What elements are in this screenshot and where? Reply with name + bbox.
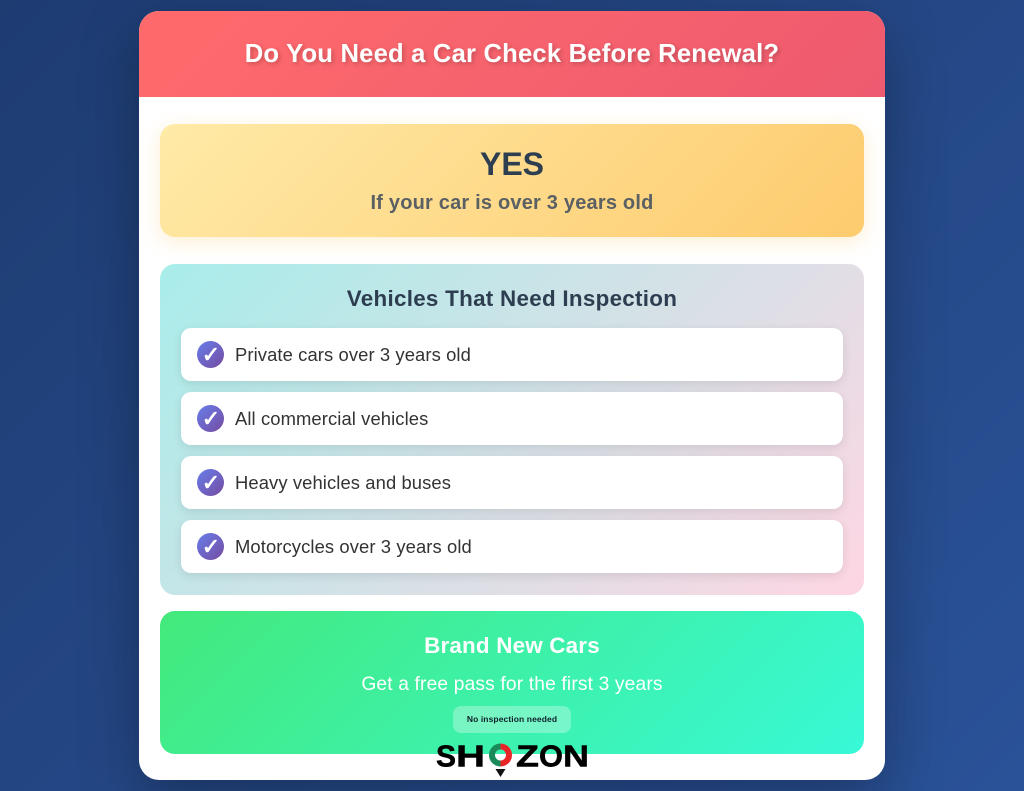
logo text left: S <box>436 738 456 774</box>
logo text right: O <box>539 738 563 774</box>
panel: yes answer <box>160 124 864 237</box>
list item: heavy vehicles <box>181 456 843 509</box>
icon: check: ✓ <box>202 535 220 560</box>
header banner <box>139 11 885 97</box>
logo text left <box>436 738 485 774</box>
list item: motorcycles <box>181 520 843 573</box>
logo text right <box>516 738 589 774</box>
logo text left: H <box>456 738 485 774</box>
logo pin pointer <box>496 769 506 777</box>
text: age condition: If your car is over 3 years old <box>370 192 654 214</box>
icon: check <box>197 341 224 368</box>
text: private cars: Private cars over 3 years old <box>235 344 471 365</box>
badge: no inspection needed <box>453 706 571 733</box>
logo pin ring <box>492 746 509 764</box>
icon: check <box>197 405 224 432</box>
text: free pass: Get a free pass for the first 3 years <box>361 674 663 695</box>
icon: check: ✓ <box>202 343 220 368</box>
badge: no inspection needed: No inspection needed <box>467 714 557 724</box>
list item: commercial vehicles <box>181 392 843 445</box>
icon: check <box>197 469 224 496</box>
panel: brand new cars <box>160 611 864 754</box>
text: motorcycles: Motorcycles over 3 years old <box>235 536 472 557</box>
list item: private cars <box>181 328 843 381</box>
title: Do You Need a Car Check Before Renewal? <box>245 40 779 68</box>
icon: check <box>197 533 224 560</box>
text: commercial vehicles: All commercial vehicles <box>235 408 428 429</box>
logo text right: N <box>563 738 589 774</box>
logo: Shozon <box>436 738 589 777</box>
icon: check: ✓ <box>202 407 220 432</box>
heading: vehicles: Vehicles That Need Inspection <box>347 286 677 311</box>
heading: brand new cars: Brand New Cars <box>424 633 600 658</box>
panel: vehicles that need inspection <box>160 264 864 595</box>
panel: main card <box>139 11 885 780</box>
heading: yes: YES <box>480 146 544 182</box>
logo text right: Z <box>516 738 539 774</box>
icon: check: ✓ <box>202 471 220 496</box>
text: heavy vehicles: Heavy vehicles and buses <box>235 472 451 493</box>
